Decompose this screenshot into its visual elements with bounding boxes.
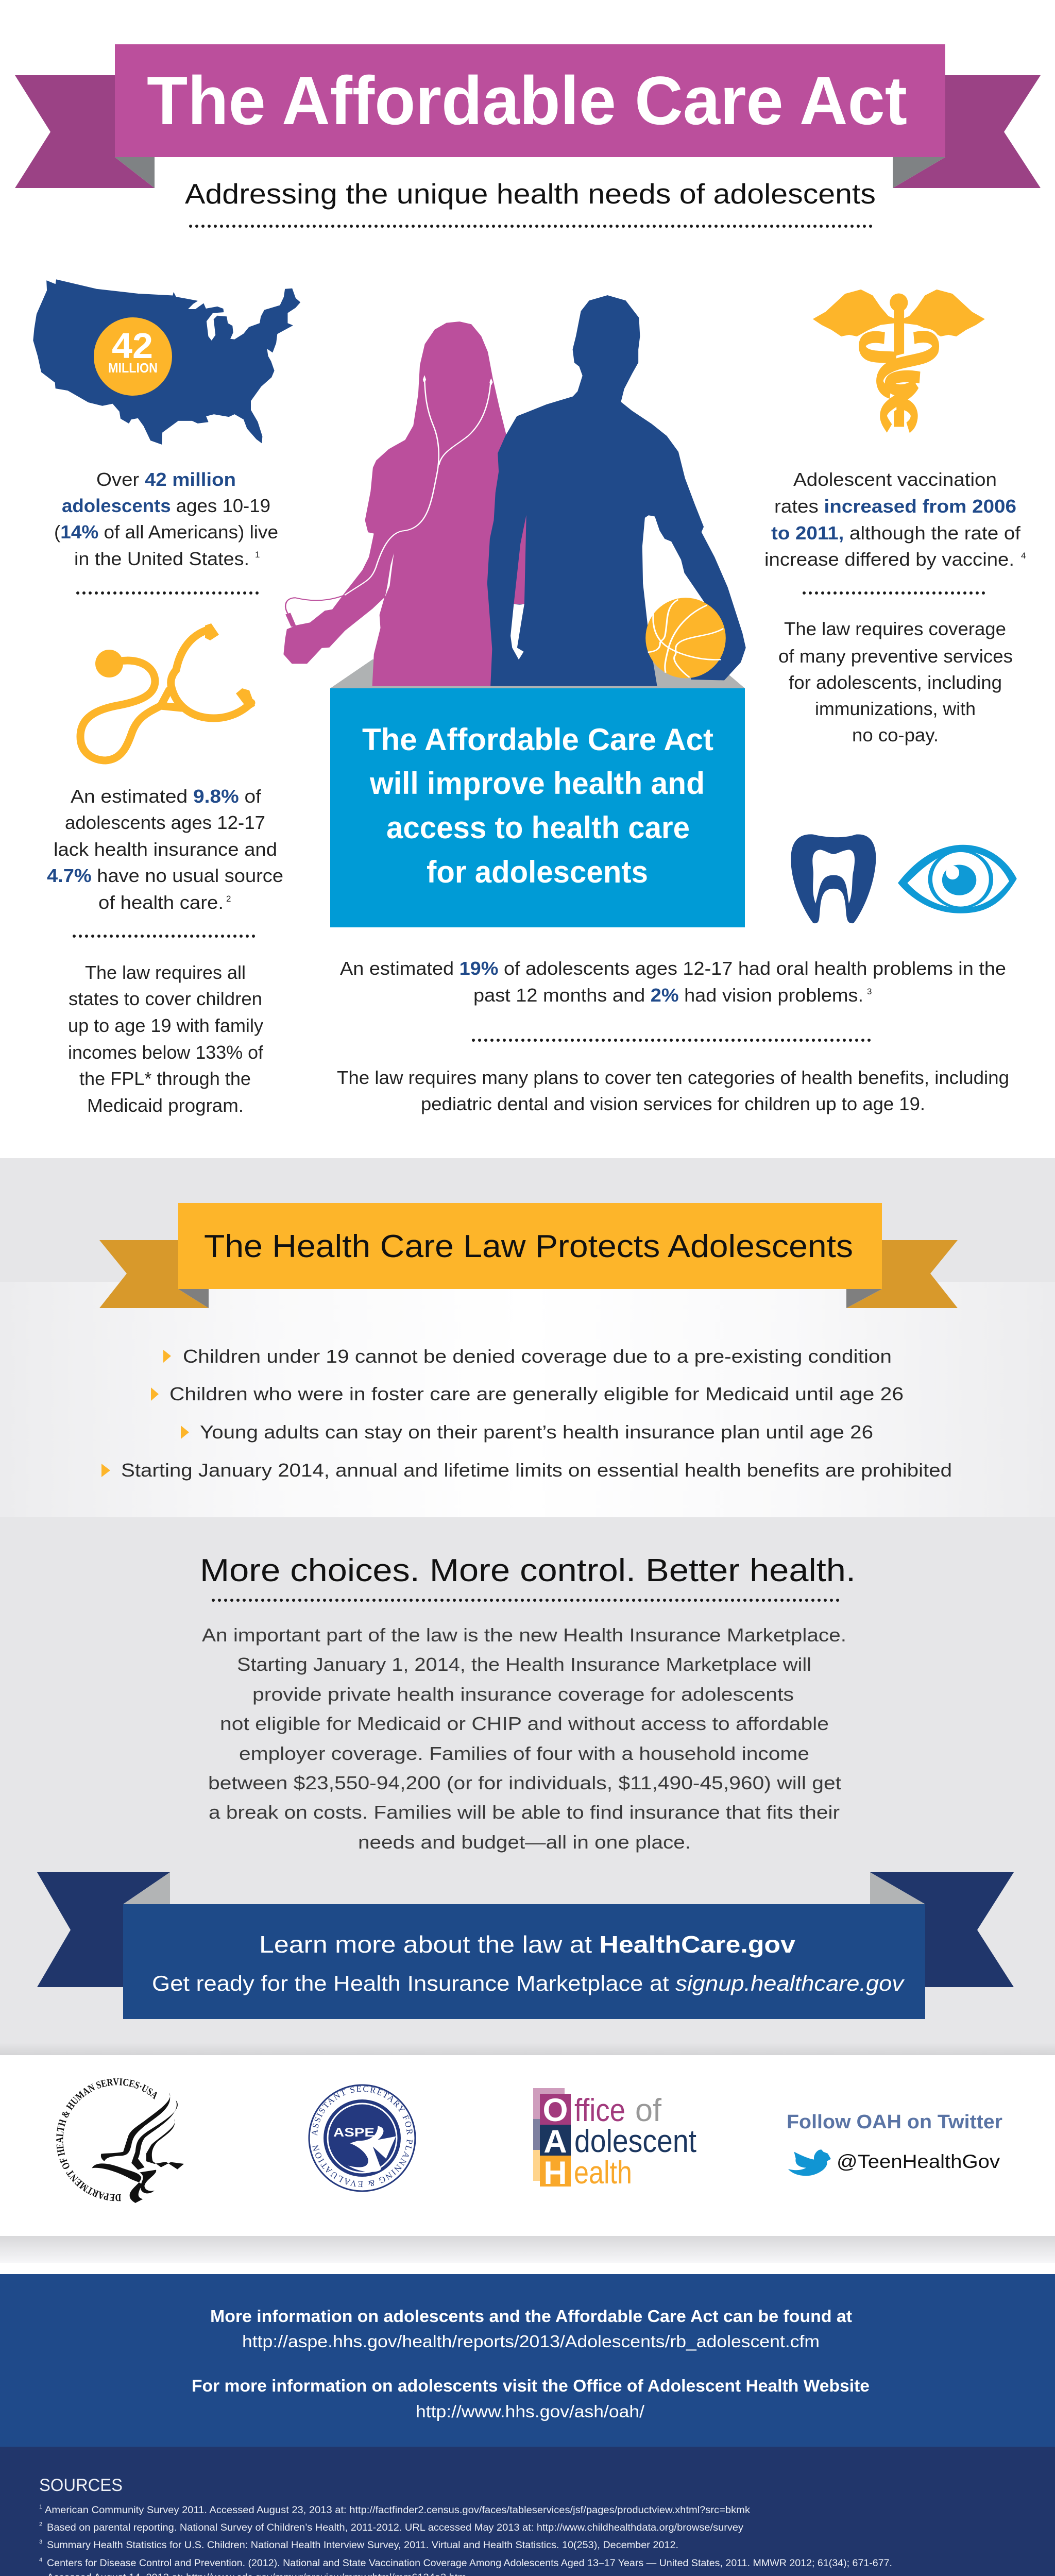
source list: 1	[39, 2504, 42, 2510]
text: preventive services law	[778, 618, 1013, 745]
text: oral health: An estimated 19% of adolescents ages 12-17 had oral health problems in the	[340, 958, 1006, 979]
text: health benefits law: The law requires many plans to cover ten categories of health benefits, including	[337, 1067, 1009, 1088]
source list	[39, 2504, 892, 2576]
text: vaccination rates: 4	[1021, 551, 1026, 561]
source list: 4	[39, 2557, 42, 2563]
text: uninsured adolescents: 2	[226, 894, 231, 904]
heading: more choices: More choices. More control. Better health.	[200, 1553, 856, 1588]
callout banner: learn more: Learn more about the law at HealthCare.gov	[259, 1931, 795, 1958]
panel: more information: For more information on adolescents visit the Office of Adolescent Health Website	[192, 2376, 870, 2395]
text: marketplace paragraph: provide private health insurance coverage for adolescents	[252, 1684, 794, 1705]
logo: ASPE: ASPE	[333, 2126, 375, 2140]
text: preventive services law: for adolescents, including	[789, 672, 1002, 693]
source list: Summary Health Statistics for U.S. Children: National Health Interview Survey, 2011. Virtual and Health Statistics. 10(253), December 2012.	[47, 2540, 678, 2551]
icon: tooth	[791, 834, 876, 923]
text: 42 million adolescents: in the United States.	[74, 548, 249, 569]
panel heading	[362, 722, 713, 889]
text: vaccination rates	[764, 469, 1026, 570]
icon: eye	[898, 845, 1017, 913]
text: marketplace paragraph: not eligible for Medicaid or CHIP and without access to affordable	[220, 1713, 829, 1734]
text: vaccination rates: increase differed by vaccine.	[764, 549, 1014, 570]
panel heading: The Affordable Care Act	[362, 722, 713, 757]
text: marketplace paragraph: employer coverage. Families of four with a household income	[239, 1743, 809, 1764]
bullet 4: Starting January 2014, annual and lifetime limits on essential health benefits are prohibited	[121, 1460, 952, 1481]
text: 42 million adolescents: Over 42 million	[96, 469, 236, 490]
text: Medicaid coverage law	[68, 962, 264, 1116]
icon: US map with 42 million badge	[33, 280, 300, 444]
text: marketplace paragraph: An important part of the law is the new Health Insurance Marketplace.	[202, 1624, 846, 1646]
bullet 1: Children under 19 cannot be denied coverage due to a pre-existing condition	[183, 1346, 892, 1367]
bullet 2: Children who were in foster care are generally eligible for Medicaid until age 26	[169, 1383, 904, 1404]
logo: HHS: DEPARTMENT OF HEALTH & HUMAN SERVICES·USA	[56, 2078, 157, 2201]
panel: more information	[0, 2274, 1055, 2447]
text: Medicaid coverage law: Medicaid program.	[87, 1095, 244, 1116]
text: 42 million adolescents: adolescents ages 10-19	[62, 495, 270, 516]
source list: 2	[39, 2521, 42, 2528]
logo: Office of Adolescent Health: dolescent	[574, 2124, 696, 2159]
text: preventive services law: immunizations, with	[815, 698, 976, 719]
source list: Centers for Disease Control and Prevention. (2012). National and State Vaccination Coverage Among Adolescents Aged 13–17 Years — United States, 2011. MMWR 2012; 61(34); 671-677.	[47, 2558, 892, 2569]
logo: Office of Adolescent Health: A	[543, 2124, 567, 2160]
text: health benefits law	[337, 1067, 1009, 1114]
illustration: boy silhouette with basketball	[487, 296, 745, 686]
logo: Office of Adolescent Health: O	[542, 2092, 568, 2128]
title: The Affordable Care Act	[147, 63, 907, 139]
list: protections	[101, 1346, 952, 1481]
icon: stethoscope	[80, 623, 255, 760]
panel: more information: http://www.hhs.gov/ash/oah/	[416, 2402, 645, 2421]
text: oral health	[340, 958, 1006, 1006]
callout banner: learn more	[37, 1872, 1014, 2019]
text: uninsured adolescents: An estimated 9.8% of	[71, 786, 262, 807]
source list: Based on parental reporting. National Survey of Children’s Health, 2011-2012. URL accessed May 2013 at: http://www.childhealthdata.org/browse/survey	[47, 2522, 744, 2533]
text: Medicaid coverage law: the FPL* through the	[79, 1068, 251, 1089]
logo: Office of Adolescent Health: of	[635, 2093, 662, 2128]
logo: Office of Adolescent Health: ffice	[574, 2093, 625, 2128]
heading banner: law protects adolescents: The Health Care Law Protects Adolescents	[204, 1229, 853, 1264]
panel heading: for adolescents	[427, 855, 648, 889]
logo: ASPE: ASSISTANT SECRETARY FOR PLANNING & EVALUATION	[312, 2086, 413, 2188]
text: marketplace paragraph: a break on costs. Families will be able to find insurance that fits their	[209, 1802, 840, 1823]
text: 42 million adolescents: 1	[255, 550, 260, 560]
panel: sources	[0, 2447, 1055, 2576]
panel heading: access to health care	[386, 810, 690, 845]
logo: Office of Adolescent Health: H	[543, 2155, 567, 2191]
source list: 3	[39, 2539, 42, 2545]
panel: central message	[330, 688, 745, 927]
icon: Twitter bird	[788, 2149, 831, 2176]
text: uninsured adolescents: 4.7% have no usual source	[47, 865, 283, 886]
text: 42 million adolescents: (14% of all Americans) live	[54, 521, 278, 543]
sources heading: SOURCES	[39, 2476, 123, 2495]
text: marketplace paragraph: needs and budget—all in one place.	[358, 1832, 691, 1853]
grey pedestal	[330, 659, 745, 688]
text: preventive services law: The law requires coverage	[784, 618, 1006, 639]
bullet 3: Young adults can stay on their parent’s health insurance plan until age 26	[200, 1421, 873, 1443]
text: vaccination rates: to 2011, although the rate of	[771, 522, 1021, 544]
text: marketplace paragraph	[202, 1624, 846, 1853]
text: uninsured adolescents: adolescents ages 12-17	[65, 812, 265, 833]
illustration: girl silhouette with earbuds	[284, 322, 527, 686]
text: Twitter handle: @TeenHealthGov	[837, 2151, 1000, 2172]
source list: American Community Survey 2011. Accessed August 23, 2013 at: http://factfinder2.census.gov/faces/tableservices/jsf/pages/productview.xhtml?src=bkmk	[45, 2505, 751, 2516]
icon: caduceus	[813, 290, 985, 429]
text: oral health: past 12 months and 2% had vision problems.	[473, 985, 863, 1006]
logo: Office of Adolescent Health	[533, 2088, 696, 2191]
text: preventive services law: of many preventive services	[778, 646, 1013, 667]
text: Medicaid coverage law: The law requires all	[85, 962, 246, 983]
icon: US map with 42 million badge: 42	[112, 326, 153, 366]
panel heading: will improve health and	[369, 766, 705, 801]
text: vaccination rates: rates increased from 2006	[774, 496, 1016, 517]
logo: Office of Adolescent Health: ealth	[574, 2155, 632, 2191]
text: health benefits law: pediatric dental and vision services for children up to age 19.	[421, 1093, 925, 1114]
icon: US map with 42 million badge: MILLION	[108, 360, 158, 376]
text: 42 million adolescents	[54, 469, 278, 569]
text: marketplace paragraph: between $23,550-94,200 (or for individuals, $11,490-45,960) will get	[208, 1772, 841, 1793]
callout banner: learn more: Get ready for the Health Insurance Marketplace at signup.healthcare.gov	[152, 1971, 905, 1995]
heading banner: law protects adolescents	[99, 1203, 958, 1308]
title banner	[15, 44, 1041, 188]
text: uninsured adolescents: of health care.	[98, 892, 224, 913]
text: oral health: 3	[867, 987, 872, 996]
text: Medicaid coverage law: incomes below 133% of	[68, 1042, 264, 1063]
text: marketplace paragraph: Starting January 1, 2014, the Health Insurance Marketplace will	[237, 1654, 811, 1675]
subtitle: Addressing the unique health needs of adolescents	[185, 178, 876, 210]
text: uninsured adolescents: lack health insurance and	[54, 839, 277, 860]
text: Medicaid coverage law: up to age 19 with family	[68, 1015, 263, 1036]
text: vaccination rates: Adolescent vaccination	[793, 469, 997, 490]
text: follow on Twitter: Follow OAH on Twitter	[787, 2111, 1002, 2133]
text: preventive services law: no co-pay.	[852, 724, 939, 745]
panel: more information: http://aspe.hhs.gov/health/reports/2013/Adolescents/rb_adolescent.cfm	[242, 2332, 820, 2351]
text: Medicaid coverage law: states to cover children	[69, 988, 262, 1009]
panel: more information: More information on adolescents and the Affordable Care Act can be found at	[210, 2307, 852, 2326]
text: uninsured adolescents	[47, 786, 283, 913]
